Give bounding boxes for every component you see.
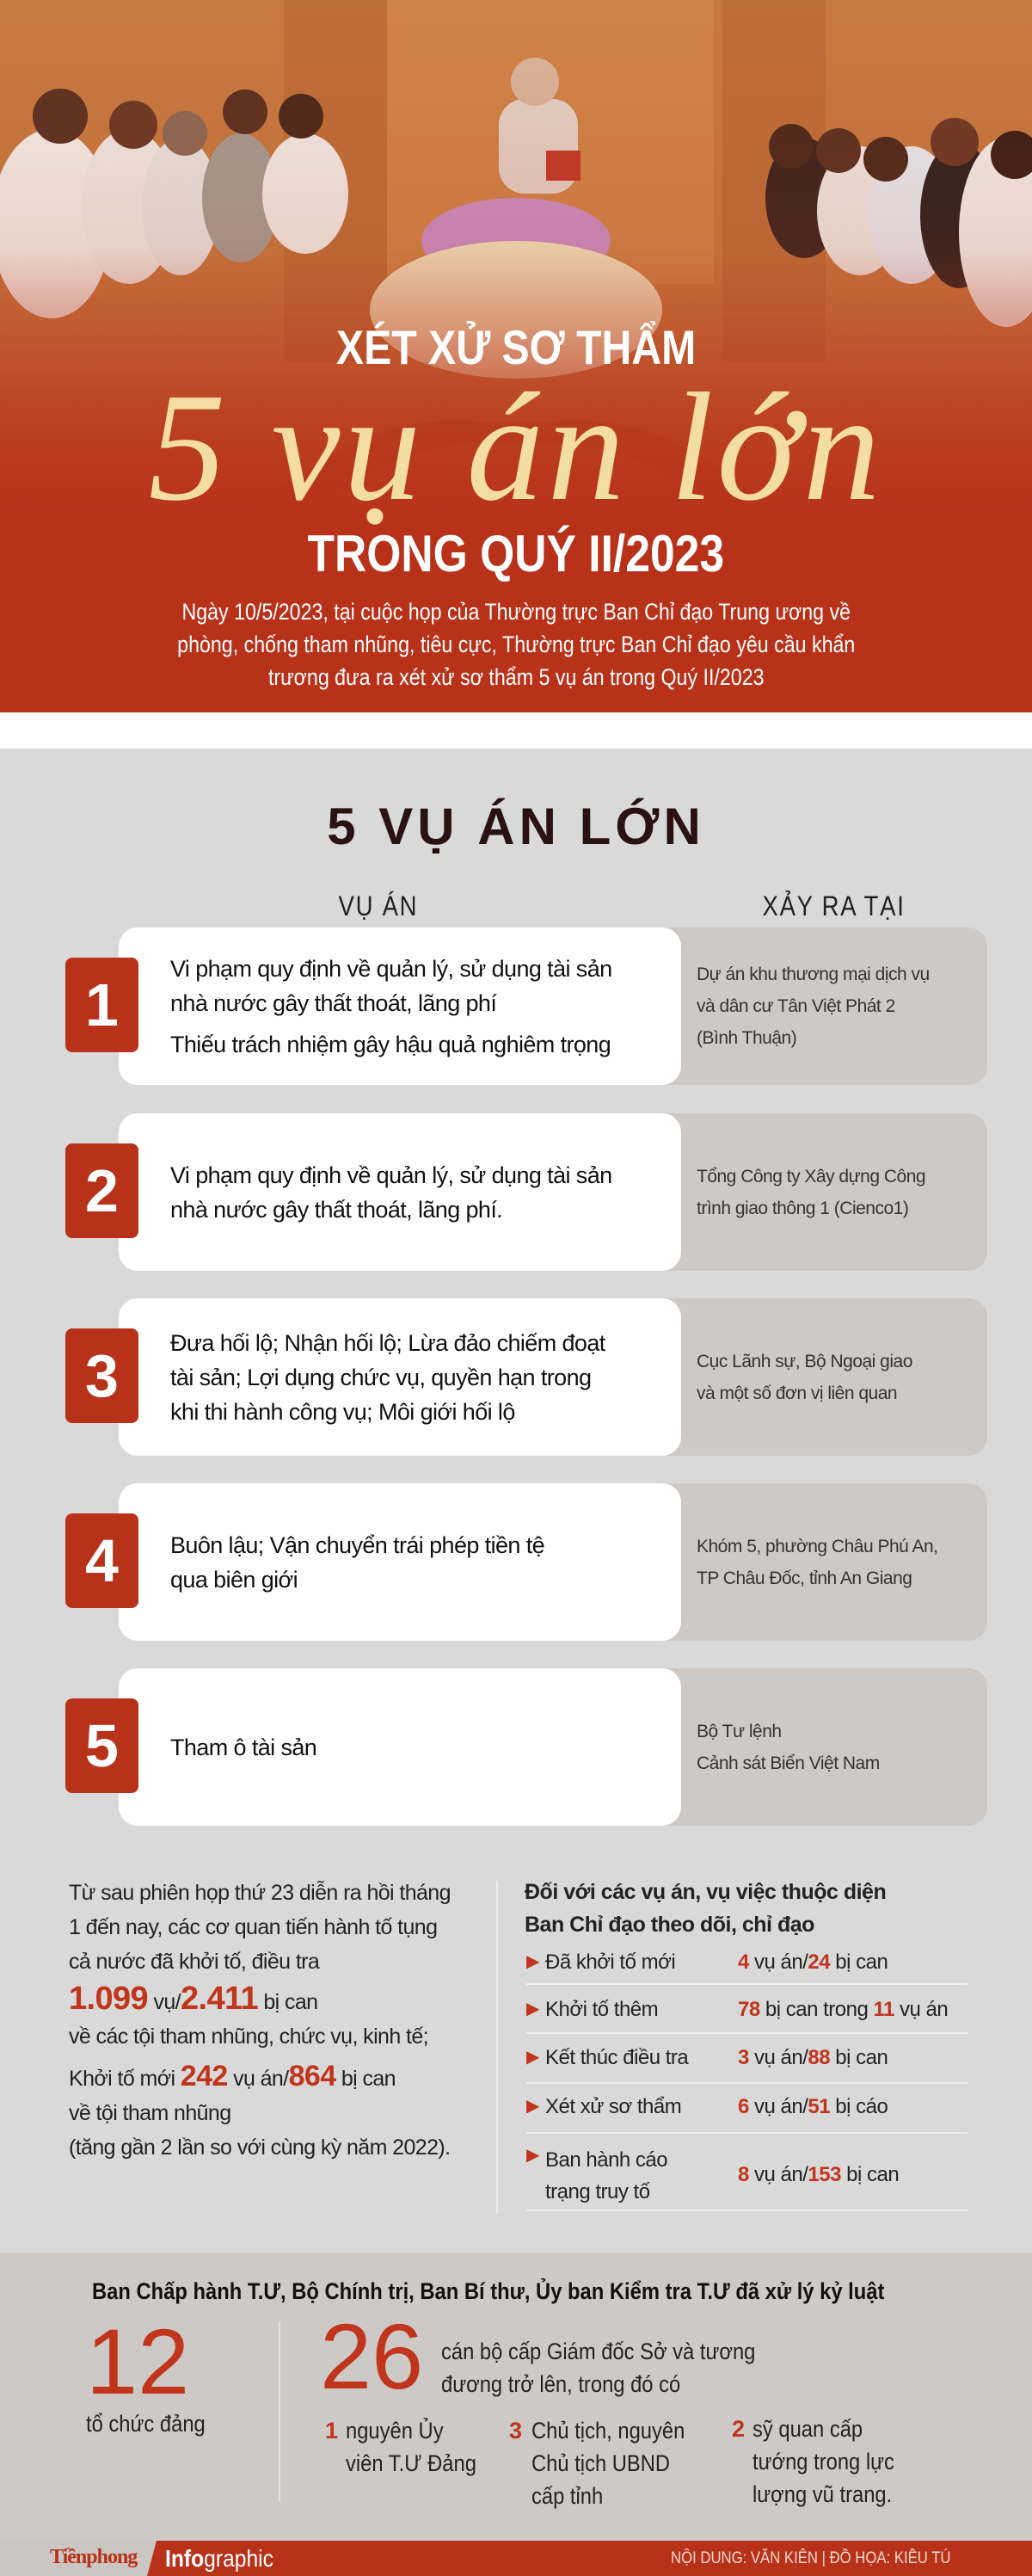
item 3: 3 xyxy=(509,2418,522,2444)
credits: NỘI DUNG: VĂN KIÊN | ĐỒ HỌA: KIỀU TÚ xyxy=(671,2549,950,2567)
stats left text: 1 đến nay, các cơ quan tiến hành tố tụng xyxy=(69,1915,437,1939)
row 3: Kết thúc điều tra xyxy=(545,2046,688,2069)
item 3: cấp tỉnh xyxy=(531,2483,603,2509)
column header: vụ án: VỤ ÁN xyxy=(339,891,418,921)
case 2 xyxy=(65,1113,987,1271)
intro paragraph xyxy=(177,599,855,690)
stat 26: đương trở lên, trong đó có xyxy=(441,2371,680,2397)
stats left text: Từ sau phiên họp thứ 23 diễn ra hồi tháng xyxy=(69,1881,451,1905)
case 4 xyxy=(65,1483,987,1641)
text: 1 xyxy=(85,971,119,1038)
case 5: Tham ô tài sản xyxy=(170,1735,316,1760)
case 3 xyxy=(65,1298,987,1456)
discipline section xyxy=(0,2252,1032,2542)
stats right table xyxy=(525,1880,968,2211)
stat 26: cán bộ cấp Giám đốc Sở và tương xyxy=(441,2339,755,2364)
row 5: 8 vụ án/153 bị can xyxy=(738,2163,899,2186)
row 3: 3 vụ án/88 bị can xyxy=(738,2046,888,2069)
case 2: Vi phạm quy định về quản lý, sử dụng tài sản xyxy=(170,1162,612,1187)
row 5: Ban hành cáo xyxy=(545,2148,667,2172)
header photo (meeting room) xyxy=(0,0,1032,465)
case 3: tài sản; Lợi dụng chức vụ, quyền hạn trong xyxy=(170,1365,591,1390)
row 1: Đã khởi tố mới xyxy=(545,1950,675,1974)
case 4: TP Châu Đốc, tỉnh An Giang xyxy=(697,1568,912,1588)
header: photo and title xyxy=(0,0,1032,712)
item 2: tướng trong lực xyxy=(752,2449,894,2474)
item 1: nguyên Ủy xyxy=(346,2418,444,2444)
title line 3: TRONG QUÝ II/2023 xyxy=(308,525,724,582)
case 4: Buôn lậu; Vận chuyển trái phép tiền tệ xyxy=(170,1531,544,1557)
row 4: Xét xử sơ thẩm xyxy=(545,2095,681,2118)
stat 12: tổ chức đảng xyxy=(86,2411,206,2437)
item 3 xyxy=(509,2418,685,2509)
footer: Tiềnphong xyxy=(50,2546,137,2568)
row 4 xyxy=(526,2095,968,2134)
case 1: Thiếu trách nhiệm gây hậu quả nghiêm trọng xyxy=(170,1031,611,1057)
item 1: viên T.Ư Đảng xyxy=(346,2450,476,2476)
logo Tiền Phong xyxy=(0,2541,157,2576)
case 1: Dự án khu thương mại dịch vụ xyxy=(697,964,930,984)
case 4: qua biên giới xyxy=(170,1566,298,1592)
row 2: Khởi tố thêm xyxy=(545,1998,658,2021)
row 2: 78 bị can trong 11 vụ án xyxy=(738,1998,948,2021)
row 2 xyxy=(526,1998,968,2034)
item 3: Chủ tịch, nguyên xyxy=(531,2418,685,2444)
text: 4 xyxy=(85,1527,119,1594)
case 1: và dân cư Tân Việt Phát 2 xyxy=(697,996,895,1016)
stats left text: 1.099 vụ/2.411 bị can xyxy=(69,1981,317,2017)
stats left text: cả nước đã khởi tố, điều tra xyxy=(69,1950,319,1974)
item 2: 2 xyxy=(732,2416,745,2442)
text: 3 xyxy=(85,1342,119,1409)
stat 26: 26 xyxy=(320,2304,423,2408)
case 1: nhà nước gây thất thoát, lãng phí xyxy=(170,989,496,1015)
case 3: khi thi hành công vụ; Môi giới hối lộ xyxy=(170,1399,515,1425)
intro paragraph: trương đưa ra xét xử sơ thẩm 5 vụ án trong Quý II/2023 xyxy=(268,664,764,690)
row 5: trạng truy tố xyxy=(545,2180,650,2203)
table heading: Ban Chỉ đạo theo dõi, chỉ đạo xyxy=(525,1913,814,1937)
case 1: (Bình Thuận) xyxy=(697,1028,796,1048)
row 3 xyxy=(526,2046,968,2084)
case 3: Đưa hối lộ; Nhận hối lộ; Lừa đảo chiếm đoạt xyxy=(170,1330,605,1356)
row 3: ▶ xyxy=(526,2048,539,2067)
title line 1: XÉT XỬ SƠ THẨM xyxy=(336,320,696,374)
stats left text: về các tội tham nhũng, chức vụ, kinh tế; xyxy=(69,2024,428,2049)
footer xyxy=(0,2541,1032,2576)
table heading: Đối với các vụ án, vụ việc thuộc diện xyxy=(525,1880,886,1904)
stat 12: 12 xyxy=(86,2309,189,2413)
row 4: 6 vụ án/51 bị cáo xyxy=(738,2095,888,2118)
item 2: lượng vũ trang. xyxy=(752,2481,892,2507)
stats left text xyxy=(69,1881,451,2160)
row 1: 4 vụ án/24 bị can xyxy=(738,1950,888,1974)
column header: xảy ra tại: XẢY RA TẠI xyxy=(763,891,906,921)
title script: 5 vụ án lớn xyxy=(149,361,883,533)
case 2: nhà nước gây thất thoát, lãng phí. xyxy=(170,1196,502,1222)
item 2: sỹ quan cấp xyxy=(752,2416,863,2442)
text: 2 xyxy=(85,1157,119,1224)
text: 5 xyxy=(85,1712,119,1779)
stats left text: về tội tham nhũng xyxy=(69,2101,231,2125)
intro paragraph: phòng, chống tham nhũng, tiêu cực, Thường trực Ban Chỉ đạo yêu cầu khẩn xyxy=(177,632,855,657)
stat 26 xyxy=(320,2304,755,2408)
case 2: trình giao thông 1 (Cienco1) xyxy=(697,1198,908,1218)
item 1: 1 xyxy=(325,2418,338,2444)
case 3: và một số đơn vị liên quan xyxy=(697,1384,897,1402)
row 1: ▶ xyxy=(526,1952,539,1971)
stats left text: (tăng gần 2 lần so với cùng kỳ năm 2022). xyxy=(69,2135,450,2160)
case 1 xyxy=(65,927,987,1085)
case 2: Tổng Công ty Xây dựng Công xyxy=(697,1167,925,1186)
Infographic label: Infographic xyxy=(165,2545,273,2572)
case 3: Cục Lãnh sự, Bộ Ngoại giao xyxy=(697,1351,912,1371)
row 5 xyxy=(526,2144,968,2211)
item 1 xyxy=(325,2418,476,2476)
discipline heading: Ban Chấp hành T.Ư, Bộ Chính trị, Ban Bí thư, Ủy ban Kiểm tra T.Ư đã xử lý kỷ luật xyxy=(92,2278,884,2304)
row 5: ▶ xyxy=(526,2146,539,2165)
item 3: Chủ tịch UBND xyxy=(531,2450,670,2476)
row 1 xyxy=(526,1950,968,1985)
table heading xyxy=(525,1880,886,1937)
item 2 xyxy=(732,2416,894,2507)
intro paragraph: Ngày 10/5/2023, tại cuộc họp của Thường trực Ban Chỉ đạo Trung ương về xyxy=(181,599,851,625)
case 1: Vi phạm quy định về quản lý, sử dụng tài sản xyxy=(170,955,612,981)
case 4: Khóm 5, phường Châu Phú An, xyxy=(697,1537,938,1556)
case 5: Cảnh sát Biển Việt Nam xyxy=(697,1753,880,1772)
section heading: 5 vụ án lớn: 5 VỤ ÁN LỚN xyxy=(327,798,705,855)
case 5 xyxy=(65,1668,987,1826)
stats left text: Khởi tố mới 242 vụ án/864 bị can xyxy=(69,2060,396,2092)
row 2: ▶ xyxy=(526,2000,539,2018)
row 4: ▶ xyxy=(526,2097,539,2116)
case 5: Bộ Tư lệnh xyxy=(697,1721,782,1741)
